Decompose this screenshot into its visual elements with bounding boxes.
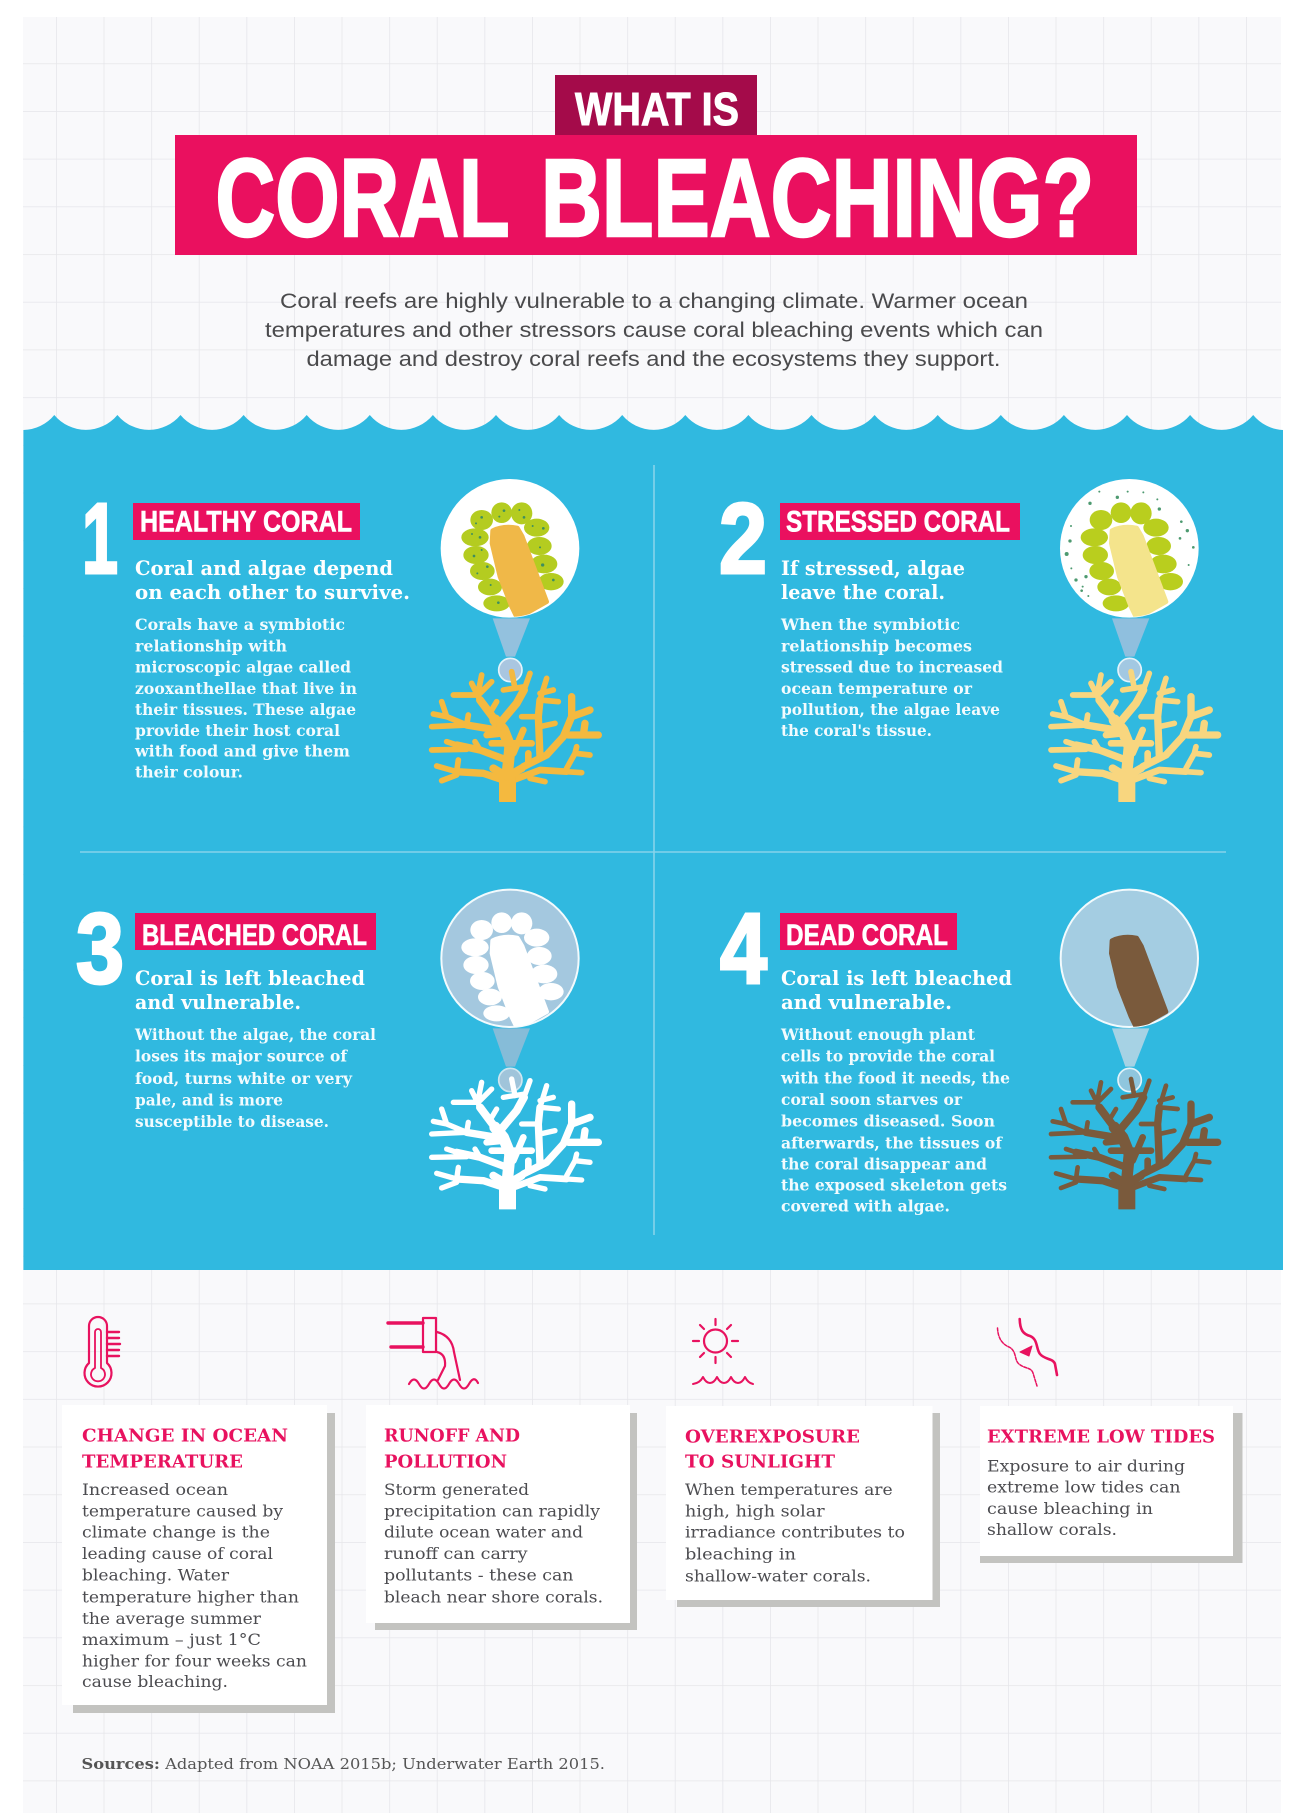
number 4: 4: [720, 893, 767, 1005]
illustration: healthy coral: [432, 479, 598, 802]
body text: loses its major source of: [135, 1047, 348, 1066]
card: change in ocean temperature: maximum – just 1°C: [82, 1631, 261, 1649]
body text: [780, 615, 1003, 740]
card: runoff and pollution: RUNOFF AND: [384, 1426, 520, 1447]
card: change in ocean temperature: temperature higher than: [82, 1589, 299, 1607]
subheading: Coral is left bleached: [781, 966, 1012, 990]
body text: When the symbiotic: [780, 615, 960, 634]
card: change in ocean temperature: leading cause of coral: [82, 1545, 273, 1563]
body text: pollution, the algae leave: [781, 700, 1000, 719]
released algae particles: [1065, 491, 1195, 597]
card: runoff and pollution: bleach near shore corals.: [384, 1589, 603, 1607]
body text: ocean temperature or: [781, 679, 973, 698]
card: runoff and pollution: pollutants - these can: [384, 1567, 574, 1585]
panel: bleached coral: [76, 890, 598, 1209]
card: runoff and pollution: runoff can carry: [384, 1545, 528, 1563]
card: overexposure to sunlight: OVEREXPOSURE: [685, 1427, 860, 1448]
body text: cells to provide the coral: [781, 1047, 995, 1066]
heading: dead coral: DEAD CORAL: [786, 919, 948, 952]
body text: with the food it needs, the: [780, 1068, 1010, 1087]
body text: covered with algae.: [781, 1197, 950, 1216]
card: change in ocean temperature: [62, 1405, 335, 1713]
body text: their tissues. These algae: [135, 700, 356, 719]
card: overexposure to sunlight: high, high solar: [685, 1503, 825, 1521]
intro text: temperatures and other stressors cause coral bleaching events which can: [265, 319, 1043, 342]
number 2: 2: [719, 483, 767, 595]
card: overexposure to sunlight: [666, 1406, 940, 1607]
panel: healthy coral: [82, 479, 598, 802]
card: change in ocean temperature: TEMPERATURE: [82, 1452, 243, 1473]
body text: becomes diseased. Soon: [781, 1112, 995, 1131]
card: change in ocean temperature: the average summer: [82, 1610, 262, 1628]
subheading: Coral is left bleached: [135, 966, 365, 990]
card: change in ocean temperature: Increased ocean: [82, 1481, 228, 1499]
card: runoff and pollution: Storm generated: [384, 1481, 529, 1499]
body text: Without the algae, the coral: [134, 1025, 376, 1044]
body text: with food and give them: [134, 742, 351, 761]
illustration: bleached coral: [432, 890, 598, 1209]
card: extreme low tides: extreme low tides can: [987, 1479, 1181, 1497]
body text: susceptible to disease.: [135, 1112, 329, 1131]
subheading: If stressed, algae: [781, 556, 965, 580]
card: extreme low tides: [980, 1406, 1242, 1563]
ocean panel with scalloped waves: [23, 415, 1283, 1270]
title: WHAT IS: [575, 83, 739, 135]
body text: [134, 1025, 376, 1131]
card: extreme low tides: cause bleaching in: [987, 1500, 1153, 1518]
body text: microscopic algae called: [135, 658, 351, 677]
body text: relationship with: [135, 636, 287, 656]
card: overexposure to sunlight: When temperatures are: [685, 1481, 893, 1499]
heading: stressed coral: STRESSED CORAL: [786, 506, 1010, 538]
body text: Corals have a symbiotic: [135, 615, 345, 634]
card: change in ocean temperature: climate change is the: [82, 1524, 270, 1542]
number 1: 1: [82, 483, 118, 595]
illustration: stressed coral: [1051, 479, 1218, 802]
card: extreme low tides: shallow corals.: [987, 1521, 1117, 1539]
body text: pale, and is more: [135, 1091, 283, 1110]
body text: zooxanthellae that live in: [135, 679, 357, 698]
illustration: dead coral: [1051, 890, 1218, 1209]
number 3: 3: [76, 893, 124, 1005]
icon: low tide waves: [998, 1319, 1057, 1386]
card: change in ocean temperature: temperature caused by: [82, 1503, 283, 1521]
subheading: [781, 556, 965, 604]
title: [175, 75, 1137, 260]
card: extreme low tides: EXTREME LOW TIDES: [987, 1427, 1215, 1448]
body text: relationship becomes: [781, 636, 972, 656]
card: runoff and pollution: precipitation can rapidly: [384, 1503, 600, 1521]
body text: the coral disappear and: [781, 1154, 987, 1173]
card: overexposure to sunlight: irradiance contributes to: [685, 1523, 905, 1541]
subheading: Coral and algae depend: [135, 556, 393, 580]
body text: coral soon starves or: [781, 1090, 963, 1109]
body text: the coral's tissue.: [781, 721, 932, 740]
body text: provide their host coral: [135, 721, 340, 740]
body text: food, turns white or very: [135, 1069, 353, 1088]
subheading: and vulnerable.: [135, 990, 301, 1014]
body text: the exposed skeleton gets: [781, 1176, 1007, 1195]
card: overexposure to sunlight: TO SUNLIGHT: [685, 1452, 836, 1473]
heading: bleached coral: BLEACHED CORAL: [142, 919, 367, 952]
intro text: Coral reefs are highly vulnerable to a changing climate. Warmer ocean: [280, 290, 1028, 313]
subheading: on each other to survive.: [135, 580, 410, 604]
card: change in ocean temperature: cause bleaching.: [82, 1673, 228, 1691]
subheading: [135, 556, 410, 604]
body text: stressed due to increased: [781, 658, 1003, 677]
heading: healthy coral: HEALTHY CORAL: [140, 506, 352, 538]
body text: [134, 615, 357, 781]
card: overexposure to sunlight: shallow-water corals.: [685, 1568, 871, 1586]
icon: outflow pipe: [388, 1318, 478, 1388]
subheading: leave the coral.: [781, 580, 945, 604]
body text: Without enough plant: [780, 1025, 976, 1044]
card: change in ocean temperature: higher for four weeks can: [82, 1653, 307, 1671]
body text: [780, 1025, 1010, 1216]
subheading: [781, 966, 1012, 1014]
subheading: and vulnerable.: [781, 990, 952, 1014]
body text: afterwards, the tissues of: [781, 1133, 1003, 1152]
title: BLEACHING?: [541, 137, 1094, 260]
icon: thermometer: [84, 1317, 120, 1387]
title: CORAL: [216, 137, 510, 260]
panel: stressed coral: [719, 479, 1218, 802]
card: change in ocean temperature: bleaching. Water: [82, 1567, 230, 1585]
intro text: [265, 290, 1043, 371]
sources: Sources: Adapted from NOAA 2015b; Underwater Earth 2015.: [82, 1756, 605, 1773]
card: extreme low tides: Exposure to air during: [987, 1458, 1185, 1476]
card: runoff and pollution: POLLUTION: [384, 1452, 507, 1473]
card: change in ocean temperature: CHANGE IN OCEAN: [82, 1426, 288, 1447]
panel: dead coral: [720, 890, 1218, 1216]
card: runoff and pollution: dilute ocean water and: [384, 1524, 583, 1542]
card: overexposure to sunlight: bleaching in: [685, 1545, 796, 1563]
card: runoff and pollution: [366, 1405, 637, 1630]
body text: their colour.: [135, 762, 243, 781]
icon: sun over water: [693, 1319, 753, 1384]
intro text: damage and destroy coral reefs and the ecosystems they support.: [306, 348, 1000, 371]
subheading: [135, 966, 365, 1014]
